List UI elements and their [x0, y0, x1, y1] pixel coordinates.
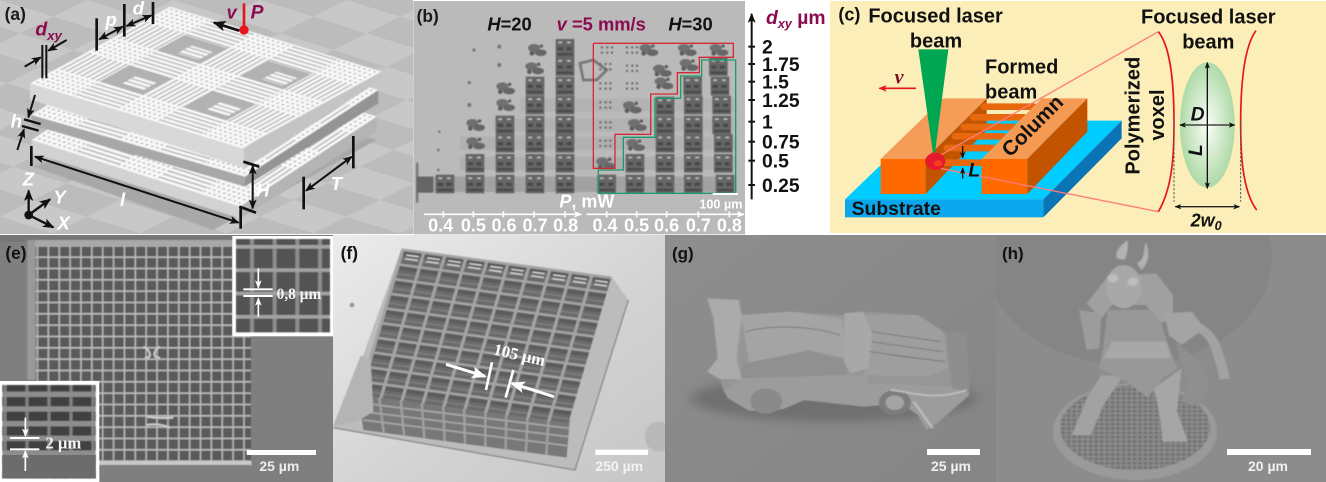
waist guides: [1174, 120, 1241, 202]
dxy axis: 2: [762, 38, 773, 59]
power axis: 0.6: [654, 216, 679, 236]
scale bar 250 um: [595, 450, 648, 474]
scale bar 100 um: 100 µm: [699, 198, 743, 212]
green boundary: [598, 60, 736, 193]
velocity arrow: [879, 66, 916, 88]
axes XYZ: X: [56, 212, 71, 233]
header labels: H=20: [487, 14, 532, 35]
lattice layers: [30, 7, 382, 218]
dimensions p and d: p: [104, 9, 117, 30]
beam waist curves: [1158, 31, 1257, 212]
power axis: [424, 191, 744, 236]
dimension dxy: d: [35, 19, 47, 40]
dimension H: [239, 162, 270, 213]
voxel ellipse: D: [1191, 105, 1205, 126]
voxel ellipse: [1180, 62, 1235, 188]
panel e: SEM square lattice: [0, 235, 333, 482]
magnification lines: [937, 32, 1158, 212]
label (b): (b): [417, 6, 439, 26]
dxy axis: 1.5: [762, 73, 789, 94]
red boundary: [593, 43, 733, 168]
power axis: 0.7: [686, 216, 711, 236]
heading: focused laser beam right: [1141, 6, 1276, 53]
substrate: [845, 121, 1122, 220]
scale bar h 20 um: [1227, 449, 1311, 474]
polymerized voxel label: Polymerized: [1122, 57, 1144, 175]
row shadows: [417, 98, 737, 192]
label (h): (h): [1002, 244, 1024, 263]
label (e): (e): [5, 243, 27, 263]
dxy axis: d: [766, 8, 793, 31]
laser velocity and power: v: [227, 3, 238, 23]
dxy axis: µm: [792, 8, 826, 29]
bottom layer: [32, 50, 377, 218]
waist dimension 2w0: [1175, 207, 1239, 233]
dxy axis: 0.5: [762, 152, 789, 173]
inset bottom left: [0, 381, 99, 482]
figurine: [1053, 240, 1225, 480]
left column: [881, 98, 987, 194]
label (f): (f): [341, 243, 358, 263]
beam height L: L: [968, 161, 980, 182]
voxel ellipse: L: [1186, 144, 1207, 156]
power axis: 0.7: [522, 216, 548, 236]
dimension h: h: [11, 110, 22, 131]
heading: focused laser beam left: (c): [838, 5, 860, 25]
dimension dxy: [25, 19, 67, 78]
right column: [982, 91, 1087, 194]
lattice: [27, 240, 252, 465]
dimension h: [11, 95, 41, 150]
dimension T: T: [331, 173, 344, 194]
polymerized voxel label: voxel: [1147, 89, 1169, 141]
car model: [707, 298, 969, 430]
dxy axis: xy: [777, 17, 793, 31]
car shadow: [690, 375, 977, 422]
torso: [1099, 310, 1177, 398]
dimension T: [304, 136, 353, 209]
right sample array H=30: [596, 44, 734, 193]
dimensions p and d: [97, 0, 153, 51]
head and horns: [1106, 265, 1141, 308]
inset top right: [232, 236, 333, 336]
power axis: 0.5: [624, 216, 649, 236]
dxy axis: 1.25: [762, 91, 800, 112]
damaged corner: [333, 356, 373, 426]
legs: [1072, 375, 1122, 435]
dxy axis: 0.75: [762, 133, 800, 154]
beam height L: [963, 146, 980, 182]
left sample array H=20: [416, 39, 607, 203]
dimension l: [31, 146, 241, 229]
dxy axis: 0.25: [762, 176, 800, 197]
heading: focused laser beam right: beam: [1182, 31, 1234, 53]
lattice pedestal: [333, 248, 628, 470]
panel c: laser writing schematic: [830, 1, 1326, 233]
heading: formed beam: beam: [985, 81, 1037, 103]
tail and cape: [1175, 342, 1209, 407]
laser velocity and power: P: [251, 3, 264, 24]
top slab: [30, 7, 382, 168]
panel f: SEM woodpile lattice: [333, 235, 665, 482]
scale bar h 20 um: 20 µm: [1248, 458, 1288, 474]
laser velocity and power: [214, 3, 264, 35]
backdrop circle: [985, 152, 1272, 365]
panel g: SEM micro car: [665, 235, 996, 482]
heading: formed beam: Formed: [985, 56, 1058, 78]
velocity arrow: v: [895, 66, 905, 88]
heading: formed beam: [985, 56, 1058, 103]
power axis: P, mW: [559, 191, 614, 211]
waist dimension 2w0: 0: [1215, 219, 1222, 233]
panel b: SEM process window: [413, 1, 826, 236]
power axis: 0.6: [491, 216, 517, 236]
header labels: [487, 14, 713, 35]
waist dimension 2w0: 2w: [1191, 211, 1215, 231]
scale bar g 25 um: 25 µm: [931, 458, 971, 474]
floor shadow: [33, 100, 377, 230]
scale bar 25 um: 25 µm: [259, 458, 299, 474]
power axis: 0.4: [592, 216, 618, 236]
header labels: H=30: [668, 14, 713, 35]
dimension 105 um: [446, 340, 554, 398]
inset top right: 0,8 µm: [277, 286, 321, 303]
power axis: 0.8: [553, 216, 578, 236]
heading: focused laser beam left: [838, 5, 1003, 52]
shoulders and arms: [1087, 273, 1173, 323]
scale bar 25 um: [247, 450, 316, 474]
heading: focused laser beam left: beam: [910, 30, 962, 52]
header labels: v =5 mm/s: [557, 14, 646, 35]
inset bottom left: 2 µm: [45, 433, 81, 452]
axes XYZ: Z: [22, 168, 35, 189]
dxy axis: 1.75: [762, 55, 800, 76]
lattice top grid: [358, 248, 612, 423]
power axis: 0.5: [461, 216, 486, 236]
dimension dxy: xy: [46, 28, 63, 43]
panel h: SEM micro figurine: [996, 235, 1326, 482]
substrate: Substrate: [852, 199, 941, 220]
scale bar g 25 um: [927, 449, 980, 474]
heading: focused laser beam right: Focused laser: [1141, 6, 1276, 28]
middle layer: [32, 28, 378, 187]
dimension l: l: [120, 189, 126, 210]
power axis: 0.8: [717, 216, 742, 236]
polymerized voxel label: [1122, 57, 1169, 175]
red focal spot: [925, 153, 945, 170]
axes XYZ: Y: [53, 186, 67, 207]
dimension 105 um: 105 µm: [492, 340, 547, 370]
formed beams: [935, 103, 1037, 166]
right column: Column: [997, 91, 1068, 161]
power axis: 0.4: [428, 216, 453, 236]
dxy axis: [748, 8, 826, 199]
round base: [1053, 383, 1217, 480]
scale bar 250 um: 250 µm: [595, 458, 643, 474]
axes XYZ: [22, 168, 71, 233]
dxy axis: 1: [762, 113, 773, 134]
lattice front face: [358, 395, 570, 458]
green laser cone: [918, 49, 948, 161]
panel a: 3D lattice schematic: [0, 0, 413, 234]
heading: focused laser beam left: Focused laser: [868, 6, 1003, 28]
label (a): (a): [5, 4, 26, 24]
dimension H: H: [256, 180, 270, 201]
label (g): (g): [672, 244, 694, 263]
